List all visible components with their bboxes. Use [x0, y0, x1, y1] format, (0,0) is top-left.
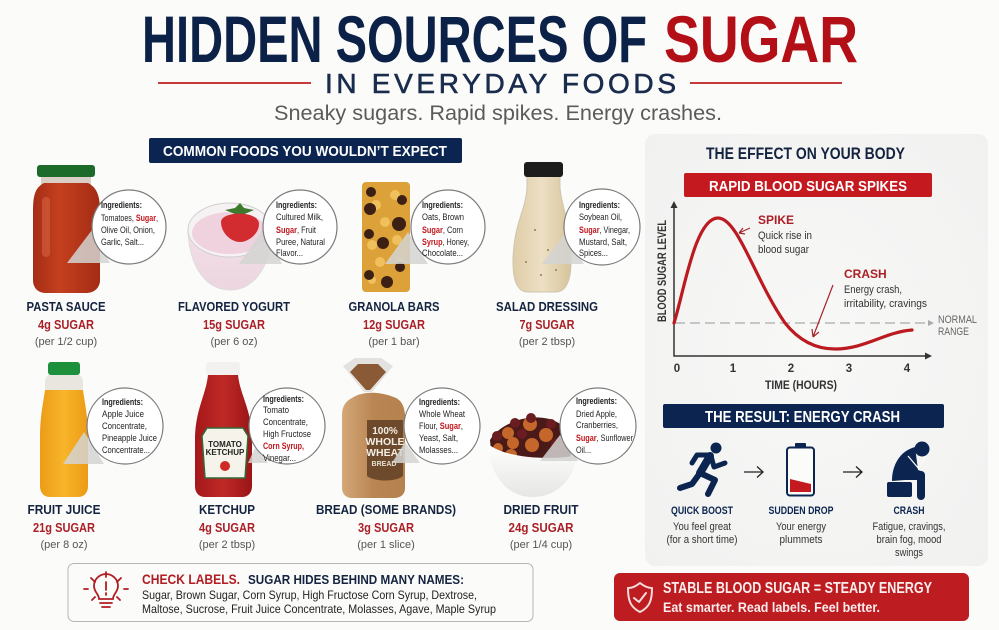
callout: ingredients: Cultured Milk,	[276, 212, 323, 223]
axis labels: 0	[674, 363, 680, 375]
callout: ingredients: Oats, Brown	[422, 212, 464, 223]
banner: stable blood sugar: Eat smarter. Read labels. Feel better.	[663, 600, 880, 615]
image: granola bar	[362, 182, 410, 292]
food: granola bars: 12g SUGAR	[363, 317, 426, 332]
banner: result: THE RESULT: ENERGY CRASH	[705, 409, 900, 426]
section banner: common foods: COMMON FOODS YOU WOULDN’T EXPECT	[163, 143, 447, 160]
food: bread: 3g SUGAR	[358, 520, 415, 535]
icon: battery	[787, 443, 814, 496]
axis labels: 1	[730, 363, 737, 375]
callout: ingredients: Ingredients:	[579, 200, 620, 211]
food: fruit juice	[28, 362, 163, 551]
icon: crashed person	[887, 442, 930, 497]
label: crash: irritability, cravings	[844, 298, 927, 310]
label: normal range: NORMAL	[938, 314, 977, 326]
label: normal range	[938, 314, 977, 338]
axis labels: TIME (HOURS)	[765, 378, 837, 392]
section banner: common foods	[149, 138, 462, 163]
axis labels: 4	[904, 363, 911, 375]
caption: quick boost: QUICK BOOST	[671, 505, 733, 517]
caption: sudden drop: SUDDEN DROP	[768, 505, 834, 517]
food: ketchup: 4g SUGAR	[199, 520, 256, 535]
arrow	[744, 466, 763, 478]
callout: ingredients: Molasses...	[419, 445, 458, 456]
image: bread loaf: BREAD	[372, 461, 396, 468]
callout: check labels: Maltose, Sucrose, Fruit Juice Concentrate, Molasses, Agave, Maple Syrup	[142, 602, 496, 616]
label: normal range: RANGE	[938, 326, 969, 338]
food: granola bars	[348, 182, 485, 348]
arrow	[843, 466, 862, 478]
label: spike: SPIKE	[758, 213, 794, 227]
food: salad dressing: (per 2 tbsp)	[519, 336, 575, 348]
caption: crash: Fatigue, cravings,	[872, 521, 946, 533]
food: flavored yogurt: 15g SUGAR	[203, 317, 266, 332]
callout: ingredients: Tomato	[263, 405, 289, 416]
callout: ingredients: Concentrate,	[263, 417, 308, 428]
icon: shield	[628, 583, 652, 612]
caption: sudden drop: Your energy	[776, 521, 826, 533]
label: spike: blood sugar	[758, 244, 809, 256]
chart: blood sugar curve	[657, 201, 977, 392]
callout: ingredients: Vinegar...	[263, 453, 296, 464]
label: spike: Quick rise in	[758, 230, 812, 242]
banner: stable blood sugar	[614, 573, 969, 621]
caption: sudden drop: plummets	[780, 534, 823, 546]
image: dressing bottle	[513, 162, 571, 292]
title: HIDDEN SOURCES OF	[142, 2, 647, 76]
callout: ingredients: Yeast, Salt,	[419, 433, 458, 444]
caption: crash	[872, 505, 946, 559]
callout: ingredients: Flavor...	[276, 248, 303, 259]
banner: result	[663, 404, 944, 428]
callout: check labels: CHECK LABELS.	[142, 571, 240, 587]
callout: ingredients: Ingredients:	[263, 394, 304, 405]
image: dried fruit bowl	[487, 413, 577, 497]
callout: ingredients: Ingredients:	[419, 397, 460, 408]
callout: ingredients: Ingredients:	[101, 200, 142, 211]
food: ketchup	[195, 362, 325, 551]
caption: quick boost: (for a short time)	[666, 534, 738, 546]
food: bread: BREAD (SOME BRANDS)	[316, 502, 456, 517]
food: granola bars: (per 1 bar)	[368, 336, 420, 348]
callout: ingredients: Ingredients:	[576, 396, 617, 407]
callout: ingredients: Sugar, Sunflower	[576, 433, 633, 444]
image: bread loaf	[342, 358, 405, 498]
callout: ingredients: Ingredients:	[276, 200, 317, 211]
food: salad dressing: SALAD DRESSING	[496, 299, 598, 314]
caption: crash: brain fog, mood	[876, 534, 942, 546]
food: ketchup: (per 2 tbsp)	[199, 539, 255, 551]
callout: ingredients: Sugar, Fruit	[276, 225, 316, 236]
callout: ingredients	[540, 388, 636, 464]
title: SUGAR	[664, 2, 858, 76]
axis labels: 3	[846, 363, 852, 375]
callout: check labels	[68, 564, 533, 622]
callout: ingredients: Syrup, Honey,	[422, 237, 469, 248]
callout: ingredients	[63, 388, 163, 464]
image: ketchup bottle: KETCHUP	[206, 448, 245, 457]
food: bread	[316, 358, 480, 551]
callout: ingredients: High Fructose	[263, 429, 311, 440]
callout: ingredients: Oil...	[576, 445, 591, 456]
callout: ingredients: Ingredients:	[422, 200, 463, 211]
callout: ingredients: Tomatoes, Sugar,	[101, 213, 158, 224]
label: spike	[758, 213, 812, 256]
callout: ingredients: Ingredients:	[102, 397, 143, 408]
food: pasta sauce	[26, 165, 166, 348]
callout: ingredients: Mustard, Salt,	[579, 237, 627, 248]
arrow: spike	[739, 228, 750, 234]
subtitle: in everyday foods: IN EVERYDAY FOODS	[325, 68, 676, 99]
icon: runner	[680, 442, 725, 494]
food: dried fruit: (per 1/4 cup)	[510, 539, 572, 551]
callout: check labels: Sugar, Brown Sugar, Corn Syrup, High Fructose Corn Syrup, Dextrose,	[142, 588, 477, 602]
image: pasta sauce jar	[33, 165, 100, 293]
caption: sudden drop	[768, 505, 834, 546]
caption: crash: swings	[895, 547, 923, 559]
callout: ingredients: Pineapple Juice	[102, 433, 157, 444]
axis labels: BLOOD SUGAR LEVEL	[657, 220, 669, 322]
axis labels	[657, 220, 911, 392]
image: juice bottle	[40, 362, 88, 497]
caption: quick boost: You feel great	[673, 521, 731, 533]
caption: crash: CRASH	[894, 505, 925, 517]
callout: ingredients: Whole Wheat	[419, 409, 465, 420]
callout: ingredients: Apple Juice	[102, 409, 144, 420]
callout: ingredients: Puree, Natural	[276, 237, 325, 248]
callout: ingredients: Sugar, Vinegar,	[579, 225, 630, 236]
image: ketchup bottle: TOMATO	[208, 440, 242, 449]
callout: ingredients: Cranberries,	[576, 420, 618, 431]
food: pasta sauce: 4g SUGAR	[38, 317, 95, 332]
callout: ingredients: Flour, Sugar,	[419, 421, 463, 432]
callout: check labels: SUGAR HIDES BEHIND MANY NAMES:	[248, 572, 464, 587]
line: blood sugar	[674, 218, 912, 349]
food: pasta sauce: (per 1/2 cup)	[35, 336, 97, 348]
food: flavored yogurt	[178, 190, 337, 348]
axis labels: 2	[788, 363, 794, 375]
callout: ingredients: Concentrate...	[102, 445, 150, 456]
banner: stable blood sugar: STABLE BLOOD SUGAR = STEADY ENERGY	[663, 580, 932, 597]
callout: ingredients	[248, 388, 325, 464]
food: ketchup: KETCHUP	[199, 502, 255, 517]
callout: ingredients: Chocolate...	[422, 248, 463, 259]
callout: ingredients: Dried Apple,	[576, 409, 617, 420]
label: crash	[844, 267, 927, 310]
image: yogurt bowl	[188, 203, 272, 290]
food: flavored yogurt: (per 6 oz)	[210, 336, 258, 348]
food: bread: (per 1 slice)	[357, 539, 415, 551]
image: bread loaf: 100%	[372, 426, 398, 437]
callout: ingredients	[542, 189, 640, 265]
caption: quick boost	[666, 505, 738, 546]
callout: ingredients: Soybean Oil,	[579, 212, 622, 223]
food: dried fruit: 24g SUGAR	[508, 520, 574, 535]
food: dried fruit: DRIED FRUIT	[504, 502, 579, 517]
icon: light bulb	[84, 572, 128, 607]
food: pasta sauce: PASTA SAUCE	[26, 299, 106, 314]
food: salad dressing: 7g SUGAR	[520, 317, 575, 332]
food: fruit juice: (per 8 oz)	[40, 539, 88, 551]
banner: rapid spikes	[684, 173, 932, 197]
image: bread loaf: WHEAT	[366, 447, 404, 459]
image: ketchup bottle	[195, 362, 252, 497]
food: granola bars: GRANOLA BARS	[348, 299, 440, 314]
food: flavored yogurt: FLAVORED YOGURT	[178, 299, 290, 314]
chart axes	[674, 204, 929, 356]
food: dried fruit	[487, 388, 636, 551]
callout: ingredients	[392, 388, 480, 464]
label: crash: Energy crash,	[844, 284, 902, 296]
callout: ingredients	[239, 190, 337, 264]
label: crash: CRASH	[844, 267, 887, 281]
food: salad dressing	[496, 162, 640, 348]
callout: ingredients	[67, 190, 166, 264]
food: fruit juice: FRUIT JUICE	[28, 502, 101, 517]
image: bread loaf: WHOLE	[365, 436, 405, 448]
panel: effect on your body	[645, 134, 988, 566]
callout: ingredients: Garlic, Salt...	[101, 237, 144, 248]
callout: ingredients	[385, 190, 485, 264]
banner: rapid spikes: RAPID BLOOD SUGAR SPIKES	[709, 178, 907, 195]
callout: ingredients: Corn Syrup,	[263, 441, 304, 452]
tagline: Sneaky sugars. Rapid spikes. Energy crashes.	[274, 102, 722, 125]
callout: ingredients: Spices...	[579, 248, 608, 259]
arrow: crash	[812, 285, 833, 337]
heading: effect on body: THE EFFECT ON YOUR BODY	[706, 144, 906, 163]
callout: ingredients: Sugar, Corn	[422, 225, 463, 236]
food: fruit juice: 21g SUGAR	[33, 520, 96, 535]
callout: ingredients: Concentrate,	[102, 421, 147, 432]
callout: ingredients: Olive Oil, Onion,	[101, 225, 155, 236]
